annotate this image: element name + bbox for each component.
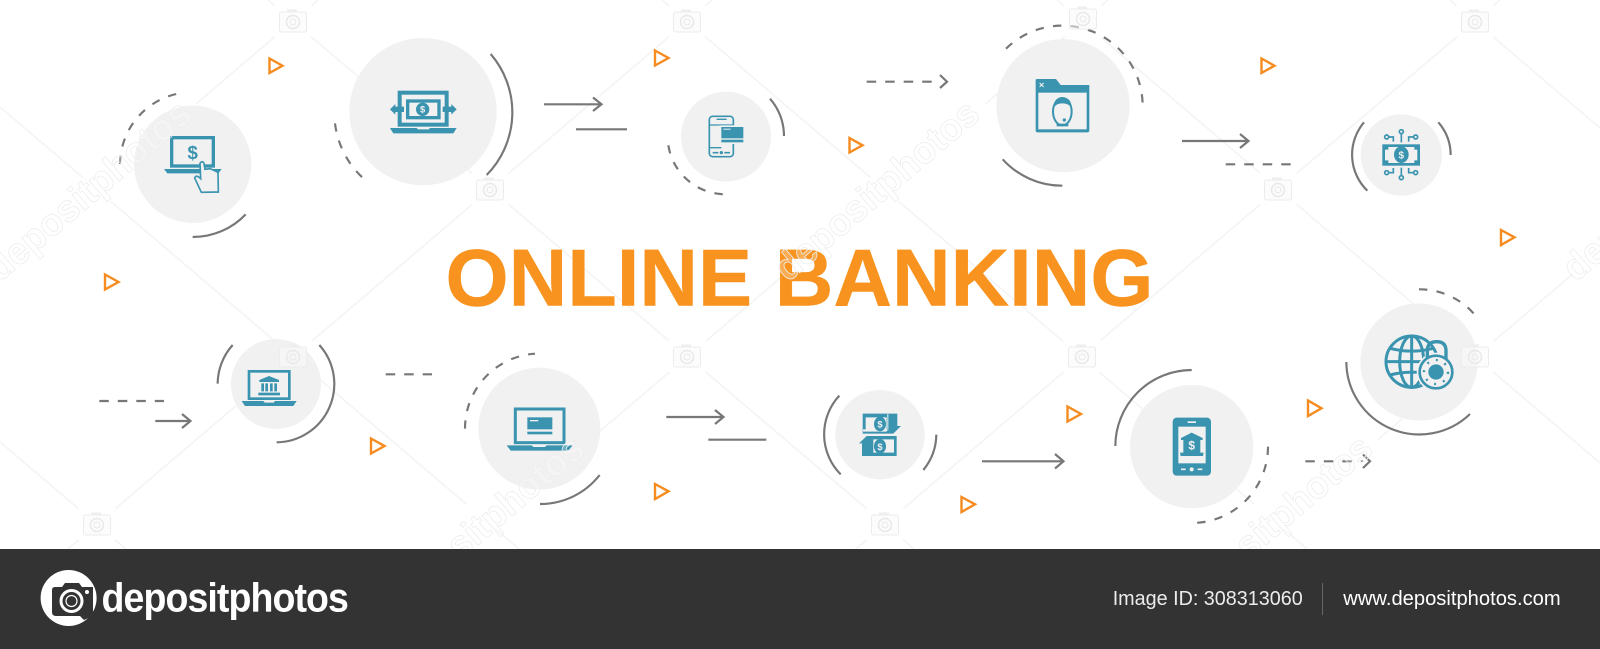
footer bar — [0, 549, 1600, 649]
dashed arc — [1006, 26, 1143, 106]
solid arc — [1003, 159, 1062, 186]
circle background — [349, 38, 497, 185]
step: global security — [1346, 289, 1478, 434]
step: money exchange — [824, 390, 936, 479]
circle background — [681, 92, 771, 182]
icon: laptop with card — [507, 409, 573, 451]
icon: browser window with headset face: × — [1039, 80, 1045, 90]
icon: laptop with banknote and arrows: $ — [420, 105, 426, 115]
arrow 6 — [982, 454, 1064, 468]
step: laptop payment — [120, 93, 251, 237]
circle background — [1130, 385, 1253, 508]
right solid arc — [923, 435, 936, 470]
icon: phone with bank — [1173, 418, 1211, 476]
icon: phone with card — [709, 116, 745, 157]
step: digital money network — [1352, 114, 1451, 196]
image id: Image ID: 308313060 — [1113, 588, 1303, 610]
arrow 7 — [1305, 454, 1370, 468]
dashed line 3 — [1226, 163, 1291, 165]
arrow 5 — [666, 410, 724, 424]
solid arc — [1115, 370, 1192, 446]
icon: laptop with banknote and arrows — [390, 93, 457, 133]
icon: browser window with headset face — [1036, 79, 1089, 132]
circle background — [835, 390, 925, 479]
dashed arc — [335, 123, 363, 178]
step: laptop money transfer — [335, 38, 512, 185]
right solid arc — [277, 345, 334, 442]
website: www.depositphotos.com — [1342, 588, 1561, 610]
watermark overlay: depositphotos — [1160, 427, 1381, 625]
arrow 2 — [867, 75, 947, 88]
circle background — [478, 368, 600, 490]
orange triangle markers — [105, 50, 1514, 512]
solid arc — [770, 99, 784, 136]
solid arc — [1346, 362, 1470, 434]
step: mobile banking — [1115, 370, 1268, 523]
icon: phone with bank: $ — [1188, 439, 1195, 453]
icon: two banknotes with arrows: $ — [877, 442, 883, 452]
logo icon: camera — [41, 570, 97, 626]
line 5 — [708, 439, 766, 441]
dashed arc — [120, 93, 179, 164]
icon: globe with lock — [1386, 336, 1455, 391]
divider — [1322, 583, 1323, 615]
circle background — [1360, 303, 1478, 421]
dashed arc — [1419, 289, 1475, 315]
step: mobile card payment — [668, 92, 784, 194]
left solid arc — [824, 396, 841, 474]
watermark overlay: depositphotos — [372, 427, 593, 625]
circle background — [1361, 114, 1442, 196]
right solid arc — [1438, 122, 1451, 155]
icon: laptop with hand — [164, 138, 222, 192]
arrow 3 — [1182, 134, 1248, 148]
step: browser support agent — [996, 26, 1143, 186]
dashed line 4 — [99, 400, 164, 402]
left solid arc — [218, 345, 233, 384]
dashed line 5 — [386, 373, 432, 375]
arrow 4 — [155, 414, 190, 428]
solid arc — [193, 214, 246, 237]
icon: laptop with hand: $ — [187, 142, 198, 163]
icon: laptop with bank building — [242, 371, 297, 406]
dashed arc — [465, 354, 535, 429]
left solid arc — [1352, 122, 1367, 191]
solid arc — [540, 475, 600, 504]
watermark overlay: depositphotos — [767, 92, 988, 290]
dashed arc — [1193, 447, 1268, 523]
dashed arc — [668, 145, 726, 194]
icon: banknote with circuit nodes: $ — [1399, 150, 1405, 161]
circle background — [996, 39, 1130, 172]
title: ONLINE BANKING — [446, 234, 1154, 324]
solid arc — [487, 54, 512, 175]
step: laptop with card — [465, 354, 600, 504]
logo wordmark: depositphotos — [102, 574, 348, 620]
line 1 — [576, 128, 627, 130]
circle background — [231, 339, 321, 429]
arrow 1 — [544, 98, 602, 111]
icon: two banknotes with arrows — [859, 414, 901, 456]
step: bank on laptop — [218, 339, 334, 442]
circle background — [134, 106, 251, 223]
icon: two banknotes with arrows: $ — [877, 420, 883, 430]
